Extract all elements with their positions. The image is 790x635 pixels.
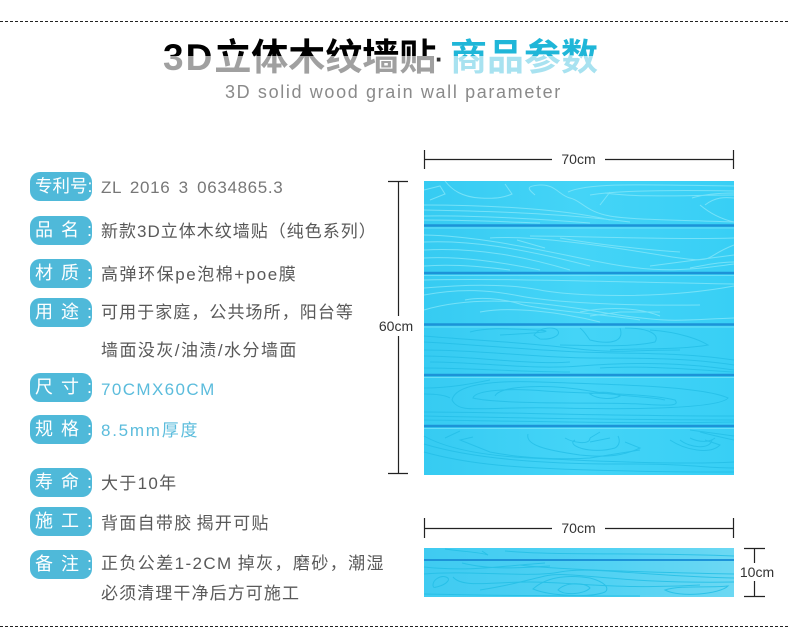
label: product name [30, 216, 92, 245]
wood grain: lower boards [424, 328, 734, 472]
label: product name: 品 名 : [35, 220, 92, 240]
label: notes: 备 注 : [35, 554, 92, 574]
notes value line 1: 正负公差1-2CM 掉灰，磨砂，潮湿 [101, 554, 385, 573]
label: size [30, 373, 92, 402]
dimension: bottom width 70cm [424, 518, 734, 538]
label: spec: 规 格 : [35, 419, 92, 439]
large wood panel [424, 181, 734, 475]
label: lifespan [30, 468, 92, 497]
notes value line 2: 必须清理干净后方可施工 [101, 584, 300, 603]
label: material: 材 质 : [35, 263, 92, 283]
label: patent [30, 172, 92, 201]
groove [424, 559, 734, 561]
installation value: 背面自带胶 揭开可贴 [101, 514, 270, 533]
label: spec [30, 415, 92, 444]
title: separator dot: · [435, 44, 444, 74]
dimension: top width 70cm [424, 150, 734, 169]
usage value line 2: 墙面没灰/油渍/水分墙面 [101, 341, 298, 360]
dimension: top width 70cm: 70cm [561, 151, 596, 167]
dimension: height 60cm [379, 181, 413, 474]
dimension: height 60cm: 60cm [379, 318, 413, 334]
size value: 70CMX60CM [101, 380, 216, 399]
wood grooves [424, 226, 734, 428]
label: usage: 用 途 : [35, 302, 92, 322]
title [164, 37, 598, 78]
title: cyan part: 商品参数 [450, 37, 598, 78]
usage value line 1: 可用于家庭，公共场所，阳台等 [101, 303, 354, 322]
subtitle: 3D solid wood grain wall parameter [225, 82, 562, 102]
dimension: height 10cm [740, 548, 774, 597]
label: lifespan: 寿 命 : [35, 472, 92, 492]
dimension: height 10cm: 10cm [740, 564, 774, 580]
label: size: 尺 寸 : [35, 377, 92, 397]
product name value: 新款3D立体木纹墙贴（纯色系列） [101, 222, 377, 241]
label: patent: 专利号: [35, 176, 92, 196]
label: installation: 施 工 : [35, 511, 92, 531]
label: usage [30, 298, 92, 327]
lifespan value: 大于10年 [101, 474, 177, 493]
label: material [30, 259, 92, 288]
wood grain: upper boards [424, 181, 734, 322]
small wood panel [424, 548, 734, 597]
label: notes [30, 550, 92, 579]
dimension: bottom width 70cm: 70cm [561, 520, 596, 536]
label: installation [30, 507, 92, 536]
material value: 高弹环保pe泡棉+poe膜 [101, 265, 297, 284]
spec value: 8.5mm厚度 [101, 421, 199, 440]
patent value: ZL 2016 3 0634865.3 [101, 178, 283, 197]
